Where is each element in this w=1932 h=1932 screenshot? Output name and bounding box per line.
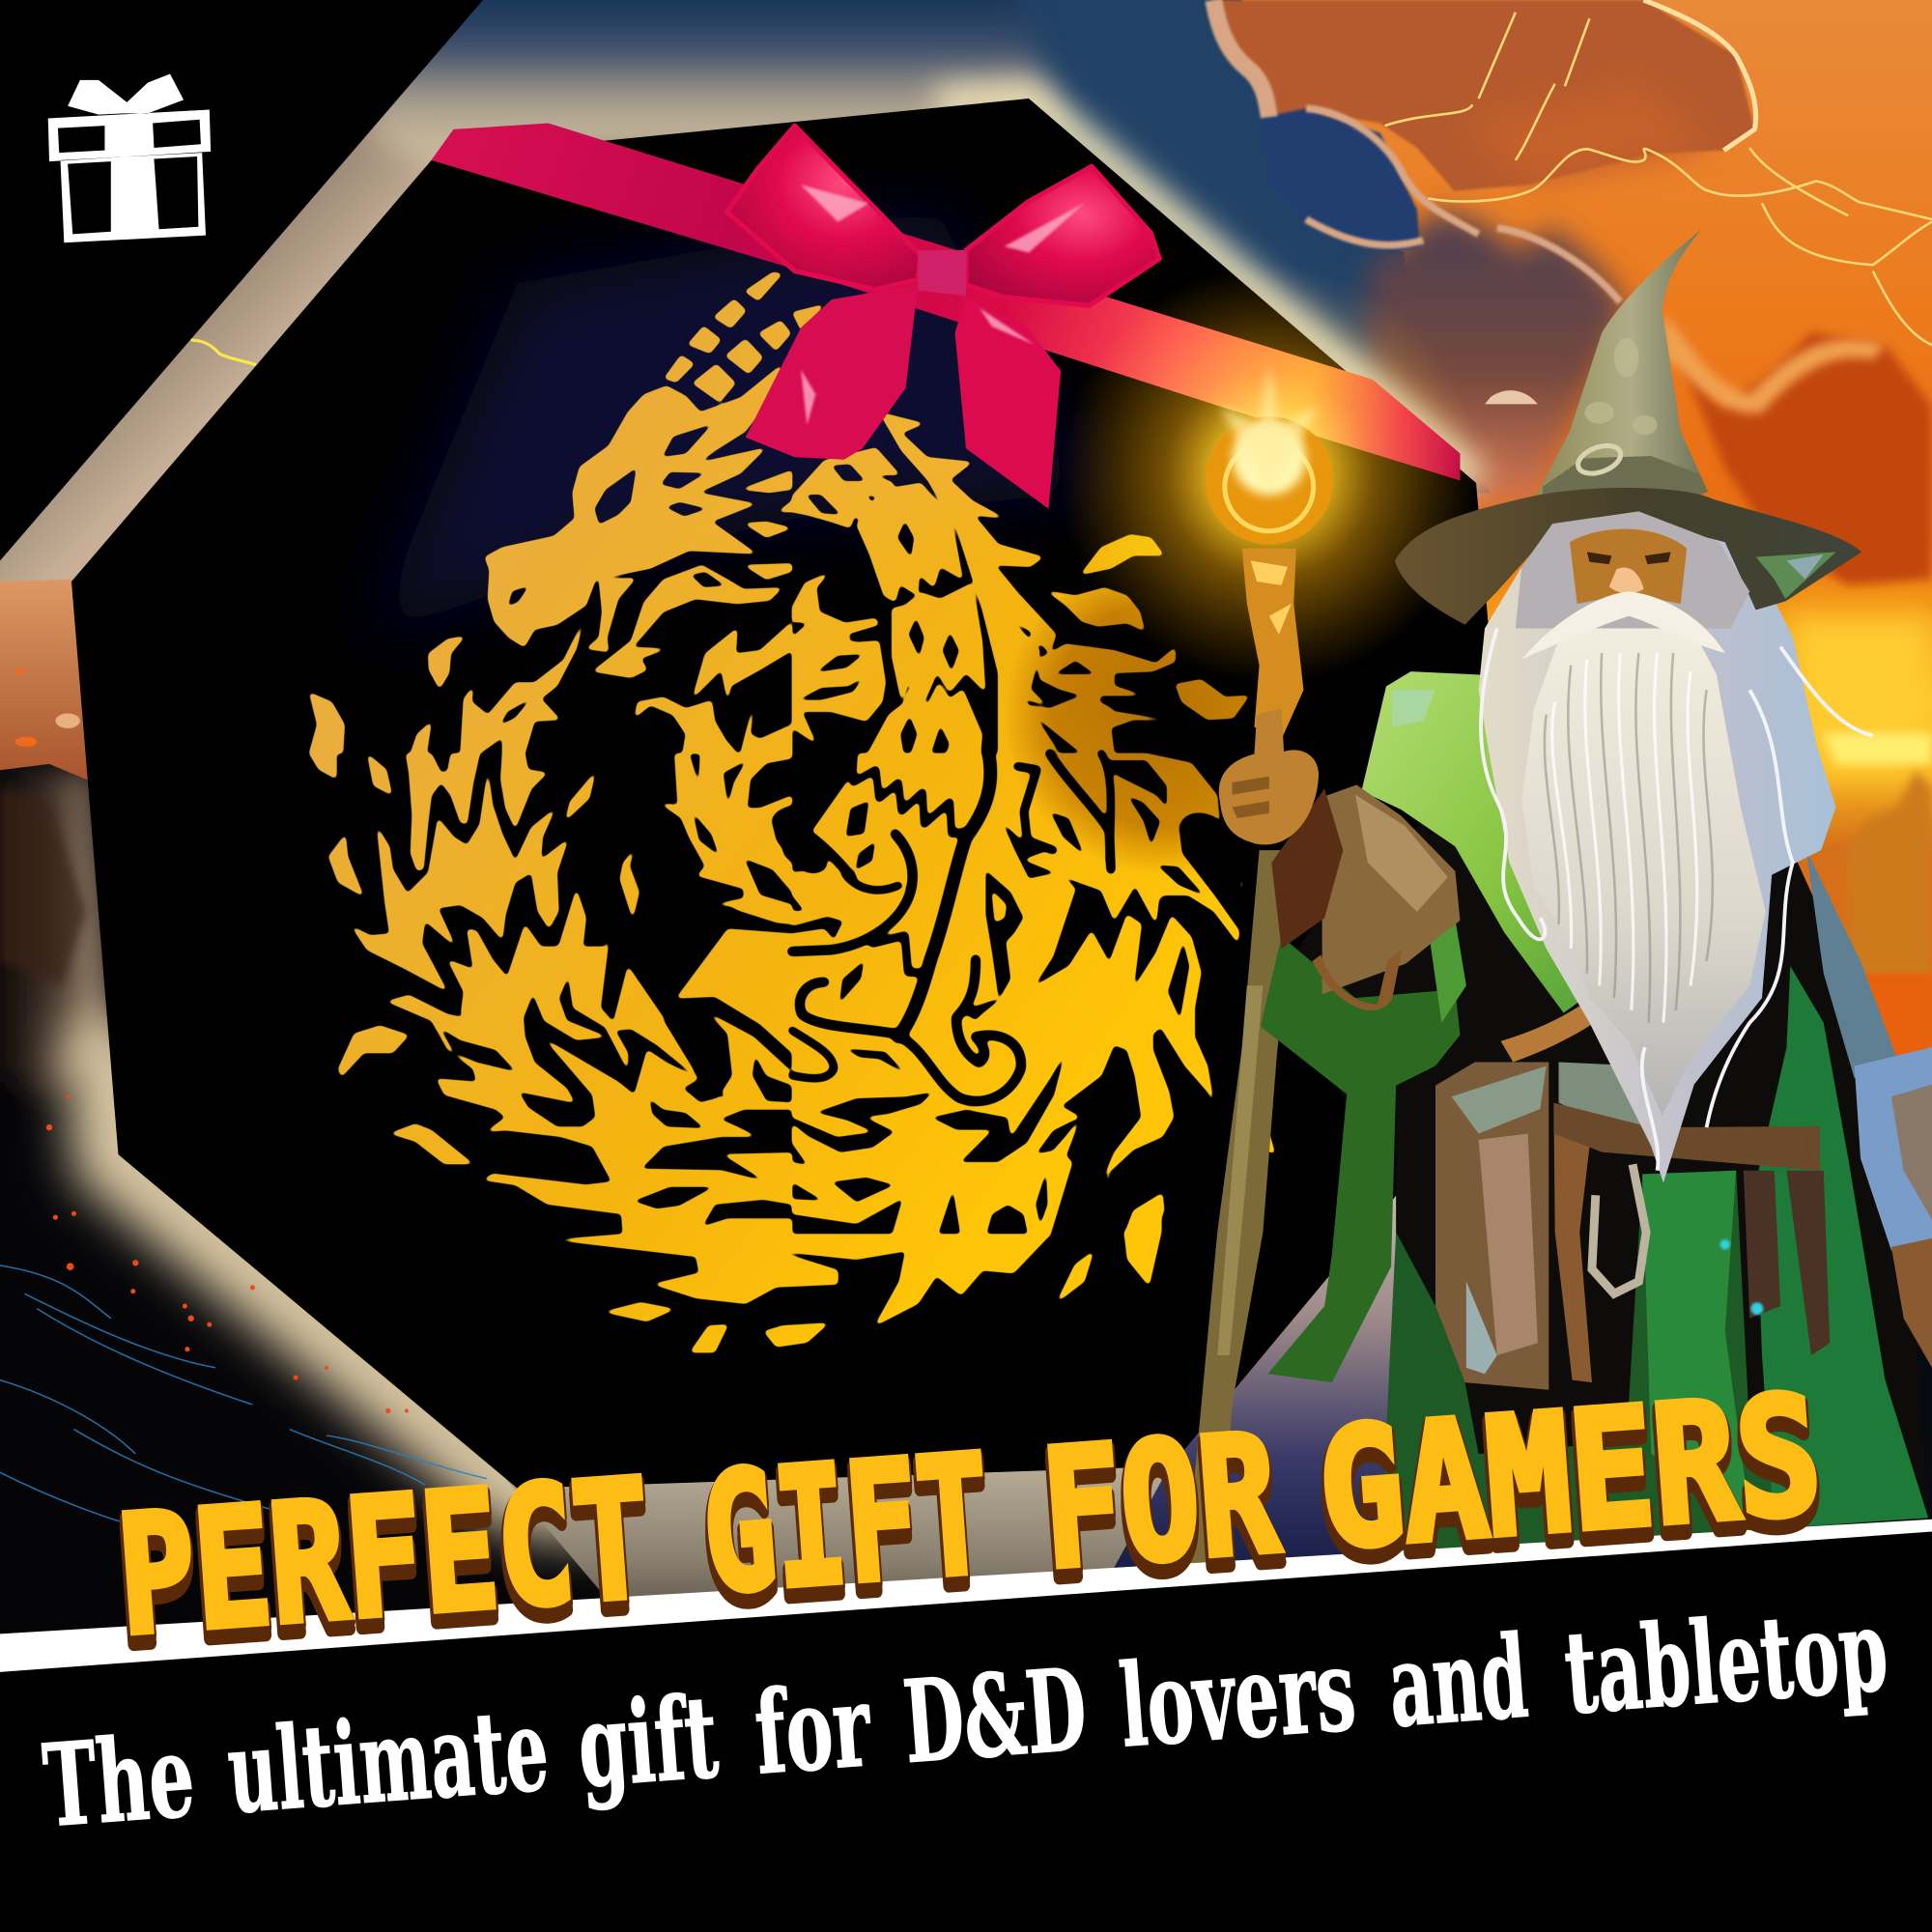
wizard: orb and staff head bbox=[1242, 549, 1303, 739]
title: GIFT bbox=[697, 1433, 995, 1641]
bow knot bbox=[918, 250, 966, 296]
ribbon band bbox=[431, 124, 1460, 480]
mat navy sheen bbox=[370, 210, 1084, 640]
title: GIFT bbox=[697, 1420, 995, 1630]
sky: red-brown storm cloud bbox=[1212, 0, 1754, 191]
title: GAMERS bbox=[1313, 1373, 1827, 1598]
title: PERFECT bbox=[112, 1457, 656, 1684]
dragon: left flames quadrant bbox=[309, 753, 792, 1236]
lower right background triangle bbox=[1109, 1182, 1405, 1577]
title: GAMERS bbox=[1313, 1360, 1827, 1585]
top-left black corner bbox=[0, 0, 483, 560]
wizard: teal gems bbox=[1720, 1239, 1763, 1315]
wizard: hat brim bbox=[1395, 488, 1861, 625]
dragon colour tint: tarnished right flames bbox=[1005, 554, 1324, 875]
dragon: bottom flames bbox=[554, 1196, 1161, 1352]
background: dark scorched land, lower left bbox=[0, 573, 863, 1638]
wizard: chest pouch bbox=[1559, 1062, 1651, 1146]
bow right loop bbox=[966, 166, 1159, 305]
wizard: brown arm bbox=[1271, 788, 1343, 949]
subtitle: for bbox=[751, 1659, 876, 1800]
glowing orb light bbox=[1060, 265, 1479, 684]
bow left loop bbox=[727, 126, 921, 290]
subtitle: and bbox=[1384, 1610, 1532, 1753]
gift icon bbox=[48, 74, 211, 242]
sky: lightning bbox=[1385, 0, 1932, 345]
sky: yellow horizon bbox=[1786, 616, 1932, 777]
subtitle: lovers bbox=[1116, 1623, 1360, 1773]
dragon colour tint: gold gradient bbox=[283, 246, 1306, 1380]
dragon: head and horns quadrant bbox=[309, 272, 792, 753]
lower centre beige strip bbox=[505, 1441, 1182, 1638]
title: PERFECT bbox=[112, 1449, 656, 1676]
crack line on band bbox=[191, 340, 259, 366]
wizard character bbox=[1185, 229, 1932, 1577]
subtitle bbox=[39, 1583, 1892, 1853]
wizard: staff lower bbox=[1185, 850, 1296, 1577]
wizard: right green cloak bbox=[1756, 966, 1928, 1528]
title: FOR bbox=[1037, 1400, 1284, 1605]
dragon: body and mane quadrant bbox=[792, 299, 1249, 753]
wizard: sleeve beige bbox=[1322, 784, 1460, 994]
wizard: white strap loop bbox=[1592, 1164, 1646, 1293]
subtitle: The bbox=[39, 1709, 199, 1853]
wizard: bright green shoulder bbox=[1361, 671, 1598, 1012]
octagon halo: lower left bbox=[108, 1023, 863, 1528]
subtitle: gift bbox=[574, 1670, 723, 1813]
wizard: belt bbox=[1553, 1103, 1820, 1171]
octagon halo: upper right bbox=[936, 99, 1476, 483]
title: GIFT bbox=[697, 1425, 995, 1634]
wizard: shoulder bag bbox=[1435, 1062, 1548, 1390]
wizard: right sleeve bbox=[1855, 1047, 1932, 1251]
title: PERFECT bbox=[112, 1444, 656, 1671]
title bbox=[112, 1360, 1827, 1684]
land details: blue streams and embers bbox=[0, 1094, 487, 1534]
sky: dark purple cloud bbox=[1368, 210, 1629, 505]
top gradient band bbox=[370, 0, 1060, 173]
black octagon mat bbox=[71, 99, 1528, 1489]
wizard: hanging straps bbox=[1744, 1171, 1830, 1355]
wizard: moustache bbox=[1521, 591, 1725, 659]
wizard: right hand bbox=[1891, 1238, 1932, 1368]
wizard: lower green robe bbox=[1380, 1171, 1922, 1559]
subtitle: D&D bbox=[899, 1642, 1091, 1789]
title: FOR bbox=[1037, 1405, 1284, 1609]
wizard: hand on staff bbox=[1219, 708, 1319, 844]
wizard: body dark base bbox=[1282, 813, 1928, 1559]
sky: blue cloud bbox=[1262, 108, 1419, 252]
top-left diagonal band bbox=[0, 0, 640, 582]
wizard: hat cone bbox=[1537, 229, 1708, 507]
wizard: long hair bbox=[1479, 529, 1836, 1182]
wizard: leather strap bbox=[1501, 894, 1694, 1062]
title: GAMERS bbox=[1313, 1365, 1827, 1590]
wizard: beard bbox=[1521, 612, 1766, 1115]
wizard: face bbox=[1570, 529, 1687, 604]
bottom black panel with white stripe bbox=[0, 1520, 1932, 1932]
sky: orange lit cloud bbox=[1674, 332, 1932, 585]
dragon: right flames quadrant bbox=[792, 753, 1275, 1236]
sky: distant treeline bbox=[1848, 770, 1932, 985]
subtitle: ultimate bbox=[223, 1683, 553, 1839]
wizard: left green drape bbox=[1261, 936, 1460, 1382]
wizard: grey hair by face bbox=[1516, 511, 1749, 629]
bow left tail bbox=[746, 285, 918, 460]
title: FOR bbox=[1037, 1411, 1284, 1617]
bow right tail bbox=[955, 297, 1061, 509]
dragon logo bbox=[277, 241, 1312, 1386]
wizard: tassel strap bbox=[1553, 1106, 1593, 1382]
red ribbon with bow bbox=[431, 124, 1460, 509]
